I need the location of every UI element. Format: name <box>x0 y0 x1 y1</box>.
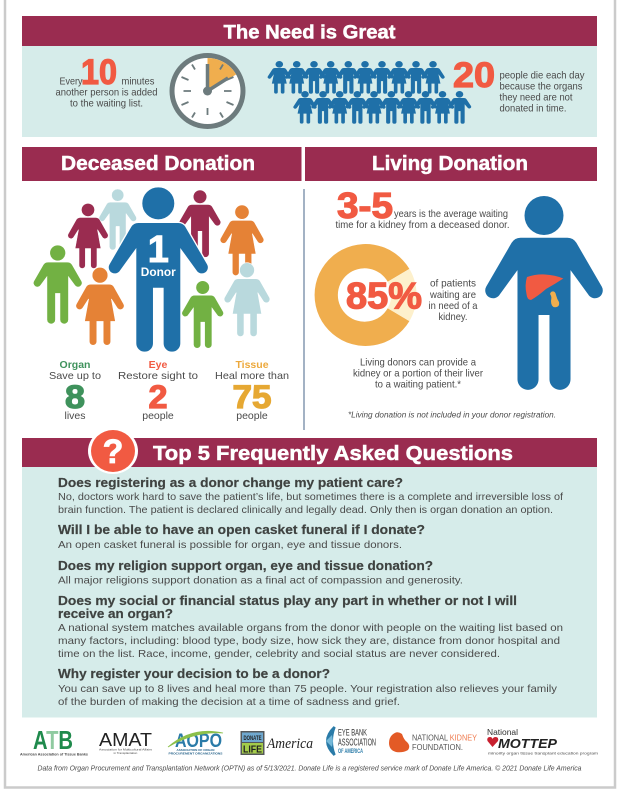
faq item 4 <box>58 593 563 660</box>
faq item 3: Does my religion support organ, eye and tissue donation? <box>58 558 433 573</box>
heading: living donation: Living Donation <box>372 153 528 175</box>
faq item 5 <box>58 666 558 708</box>
logo: national kidney foundation: FOUNDATION. <box>412 742 463 752</box>
stat: tissue: 75 <box>232 379 272 415</box>
text: 20 people die each day <box>453 56 585 114</box>
logo: national mottep: National <box>487 728 518 737</box>
source note: Data from Organ Procurement and Transplantation Network (OPTN) as of 5/13/2021. Donate Life is a registered service mark of Donate Life America. © 2021 Donate Life America <box>38 764 582 772</box>
heading: the need is great: The Need is Great <box>224 22 396 44</box>
faq item 2: Will I be able to have an open casket funeral if I donate? <box>58 522 425 537</box>
panel: the need is great <box>22 16 597 137</box>
stat: eye: Restore sight to <box>118 370 198 382</box>
logo: national kidney foundation: NATIONAL KIDNEY <box>412 732 477 742</box>
logo: amat: Association for Multicultural Affairs <box>99 748 153 752</box>
text: every 10 minutes <box>56 53 158 110</box>
logo: donate life america: LIFE <box>243 744 262 756</box>
text: 20 people die each day: people die each day <box>500 70 585 82</box>
faq item 1: brain function. The patient is declared clinically and legally dead. Only then is organ donation an option. <box>58 504 553 516</box>
chart: 85 percent donut <box>315 244 422 346</box>
text: of patients waiting <box>428 278 478 323</box>
logo: national kidney foundation <box>389 732 477 752</box>
logo: atb <box>20 725 88 756</box>
text: 3-5 years waiting <box>336 185 510 231</box>
logo: atb: American Association of Tissue Banks <box>20 752 88 756</box>
text: living donors can provide: to a waiting patient.* <box>375 378 461 390</box>
panel: deceased donation <box>22 147 302 422</box>
text: living donors can provide: kidney or a portion of their liver <box>353 368 483 380</box>
icon: question mark: ? <box>103 433 123 471</box>
stat: organ: Organ <box>60 359 90 371</box>
text: 3-5 years waiting: time for a kidney from a deceased donor. <box>336 219 510 231</box>
logos row <box>20 725 599 756</box>
illustration: one donor and recipients <box>33 187 270 352</box>
faq item 3 <box>58 558 463 586</box>
faq item 1 <box>58 475 563 516</box>
text: 1 donor: Donor <box>141 265 176 279</box>
text: 1 donor: 1 <box>148 229 169 271</box>
text: 3-5 years waiting: 3-5 <box>337 185 393 226</box>
stat: tissue: Heal more than <box>215 370 289 382</box>
faq item 4: time on the list. Race, income, gender, celebrity and social status are never considered. <box>58 648 500 660</box>
logo: national mottep: MOTTEP <box>498 736 557 751</box>
heading: deceased donation: Deceased Donation <box>61 153 255 175</box>
stat: eye: 2 <box>148 379 168 415</box>
heading: the need is great <box>22 16 597 46</box>
text: 1 donor <box>141 229 176 279</box>
text: of patients waiting: kidney. <box>438 311 468 323</box>
text: of patients waiting: of patients <box>430 278 476 290</box>
text: 20 people die each day: 20 <box>453 56 495 95</box>
text: 3-5 years waiting: years is the average waiting <box>394 208 508 220</box>
faq item 4: many factors, including: blood type, body size, how sick they are, distance from donor hospital and <box>58 635 560 647</box>
logo: aopo: AOPO <box>175 730 222 752</box>
faq item 5: You can save up to 8 lives and heal more than 75 people. Your registration also relieves your family <box>58 683 558 695</box>
text: every 10 minutes: another person is added <box>56 86 158 98</box>
text: every 10 minutes: to the waiting list. <box>70 98 143 110</box>
text: every 10 minutes: minutes <box>122 76 154 88</box>
footnote: *Living donation is not included in your donor registration. <box>348 410 556 420</box>
logo: national mottep <box>487 728 599 756</box>
faq item 3: All major religions support donation as a final act of compassion and generosity. <box>58 574 463 586</box>
faq item 2 <box>58 522 425 551</box>
stat: tissue <box>215 359 289 422</box>
text: of patients waiting: waiting are <box>429 289 476 301</box>
faq item 5: of the burden of making the decision at a time of sadness and grief. <box>58 696 400 708</box>
stat: eye: people <box>142 410 174 422</box>
panel: faq <box>22 428 597 718</box>
logo: donate life america <box>240 731 313 756</box>
faq item 4: Does my social or financial status play any part in whether or not I will <box>58 593 517 608</box>
logo: eye bank association: EYE BANK <box>338 728 367 738</box>
faq item 1: No, doctors work hard to save the patient’s life, but sometimes there is a complete and irreversible loss of <box>58 491 563 503</box>
icon: question mark <box>88 428 138 474</box>
text: 20 people die each day: donated in time. <box>500 102 566 114</box>
stat: organ: Save up to <box>49 370 101 382</box>
logo: amat: AMAT <box>99 730 152 750</box>
stat: organ: lives <box>64 410 86 422</box>
logo: donate life america: America <box>266 736 313 752</box>
text: every 10 minutes: Every <box>60 76 83 88</box>
stat: tissue: Tissue <box>235 359 269 371</box>
text: 20 people die each day: because the organs <box>500 80 582 92</box>
icon: row of people two <box>293 91 471 124</box>
faq item 5: Why register your decision to be a donor? <box>58 666 330 681</box>
stat: organ <box>49 359 101 422</box>
faq item 4: A national system matches available organs from the donor with people on the waiting list based on <box>58 622 563 634</box>
stat: organ: 8 <box>65 379 85 415</box>
logo: amat: in Transplantation <box>114 751 138 755</box>
text: living donors can provide: Living donors can provide a <box>360 356 476 368</box>
icon: body with liver and kidney <box>485 196 603 390</box>
logo: eye bank association <box>326 727 376 755</box>
logo: eye bank association: ASSOCIATION <box>338 738 376 748</box>
logo: aopo: ASSOCIATION OF ORGAN <box>176 748 214 752</box>
logo: donate life america: DONATE <box>244 736 262 742</box>
chart: 85 percent donut: 85% <box>346 276 422 316</box>
heading: top 5 faq: Top 5 Frequently Asked Questions <box>153 443 513 465</box>
stat: tissue: people <box>236 410 268 422</box>
logo: atb: ATB <box>33 725 73 755</box>
heading: deceased donation <box>22 147 302 181</box>
logo: aopo: PROCUREMENT ORGANIZATIONS <box>168 752 222 756</box>
logo: eye bank association: OF AMERICA <box>338 749 363 755</box>
logo: national mottep: minority organ tissue transplant education program <box>488 750 599 756</box>
text: every 10 minutes: 10 <box>81 53 117 92</box>
faq item 2: An open casket funeral is possible for organ, eye and tissue donors. <box>58 539 402 551</box>
stat: eye: Eye <box>149 359 167 371</box>
text: of patients waiting: in need of a <box>428 300 478 312</box>
heading: living donation <box>305 147 597 181</box>
icon: row of people one <box>268 61 445 94</box>
text: living donors can provide <box>353 356 483 390</box>
faq item 4: receive an organ? <box>58 606 173 621</box>
stat: eye <box>118 359 198 422</box>
heading: top 5 faq <box>22 438 597 467</box>
icon: clock <box>170 53 246 129</box>
panel: living donation <box>305 147 603 420</box>
faq item 1: Does registering as a donor change my patient care? <box>58 475 403 490</box>
logo: aopo <box>168 730 223 756</box>
text: 20 people die each day: they need are not <box>500 92 573 104</box>
